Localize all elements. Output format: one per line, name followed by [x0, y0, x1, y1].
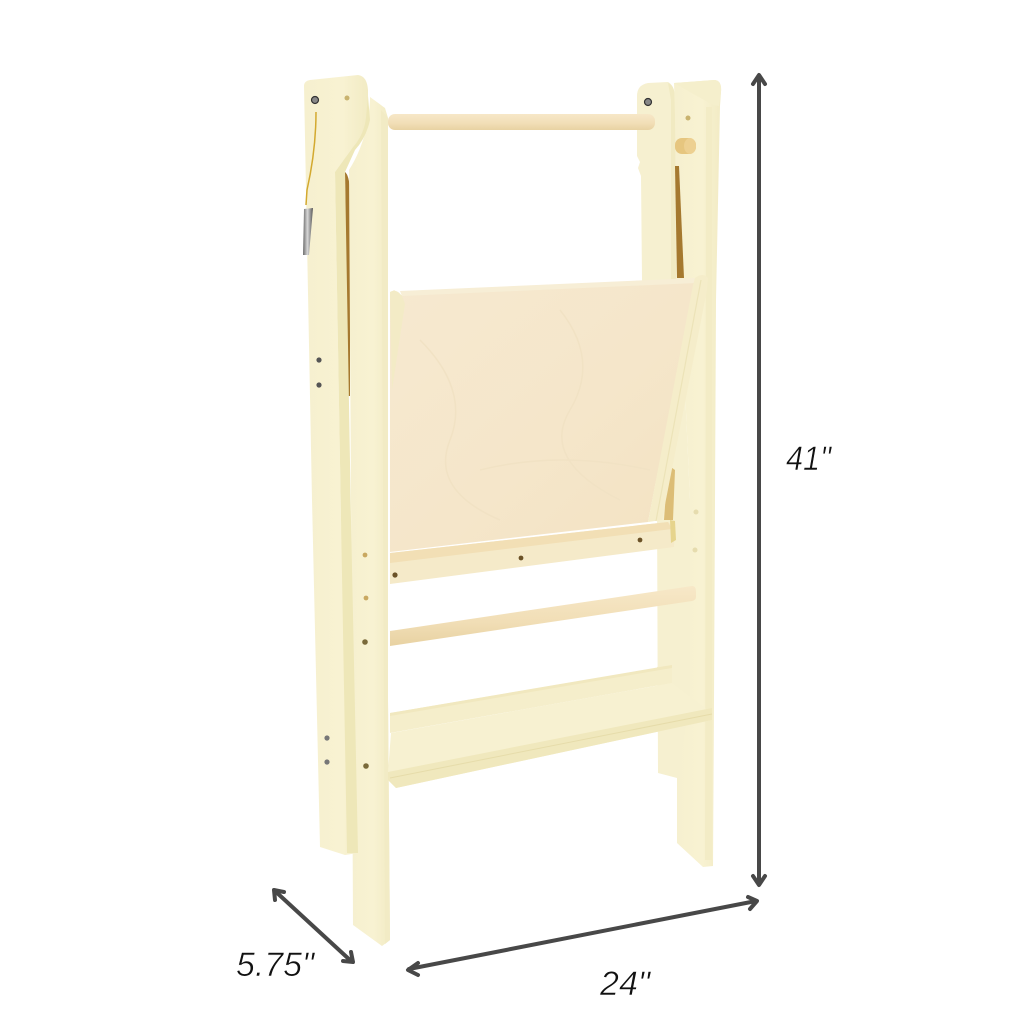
lower rod — [390, 586, 696, 646]
label: 41 inches: 41" — [786, 440, 833, 478]
product: folded wooden step stool — [303, 75, 721, 946]
backrest panel — [390, 275, 708, 552]
plywood edge of left rear leg — [335, 96, 370, 853]
pull pin with cord — [303, 112, 316, 255]
lower back board — [390, 665, 672, 733]
slot shadow — [345, 172, 350, 396]
label: 24 inches: 24" — [599, 965, 652, 1003]
peg — [675, 138, 696, 154]
dimension arrow: height — [753, 75, 765, 885]
white slot gap — [349, 396, 351, 460]
right front leg — [674, 80, 721, 867]
left front leg — [349, 97, 390, 946]
label: 5.75 inches: 5.75" — [236, 946, 316, 984]
left rear leg — [304, 75, 368, 855]
dimension arrow: depth — [274, 890, 353, 962]
top rod — [388, 114, 655, 130]
upper shelf front edge — [390, 520, 676, 584]
right rear leg — [637, 82, 705, 778]
step — [388, 683, 712, 788]
dimension arrow: width — [408, 897, 757, 975]
